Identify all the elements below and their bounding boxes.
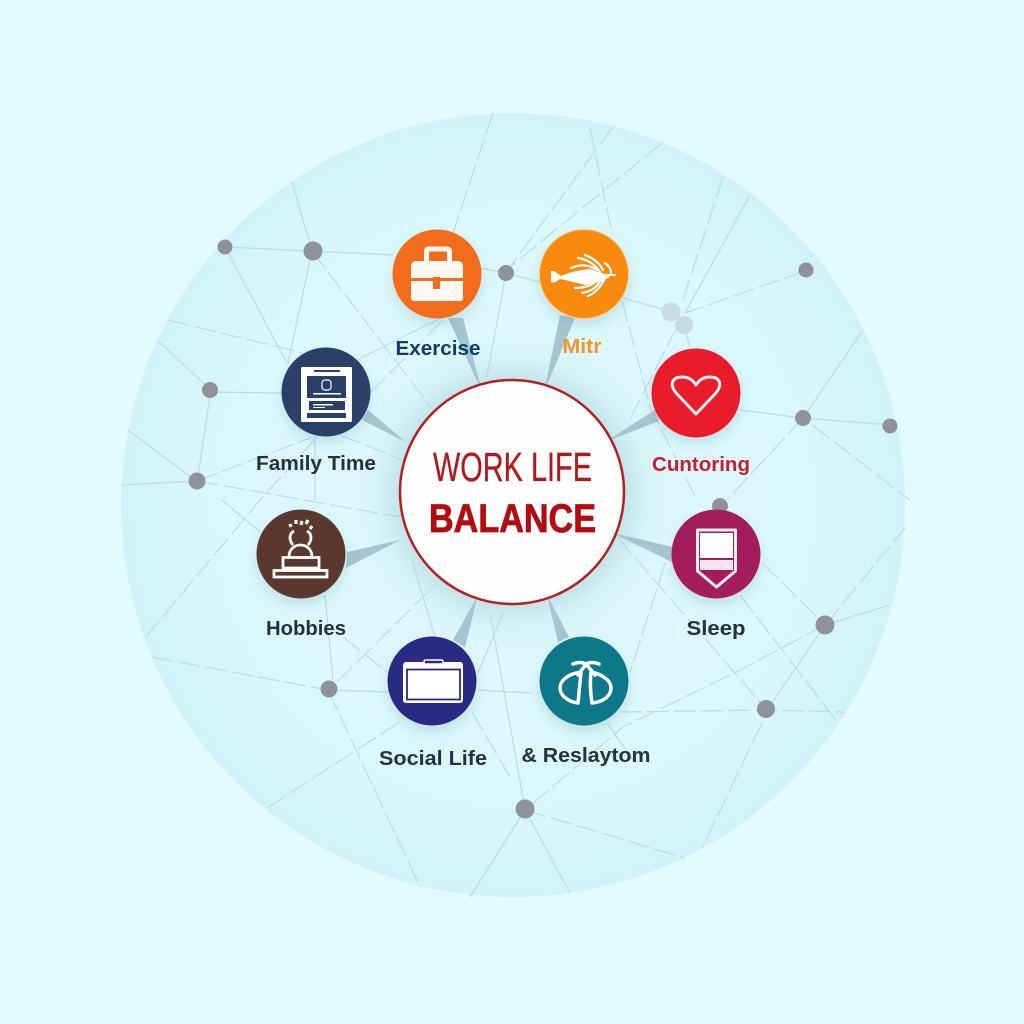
icon: heart [672, 377, 720, 414]
icon: figure on stand [274, 520, 327, 577]
title: work life: WORK LIFE [433, 444, 592, 490]
label: Cuntoring [652, 454, 750, 476]
connectors [346, 315, 672, 647]
item: relaxation [522, 636, 650, 767]
network lines [122, 113, 910, 897]
item: sleep [672, 510, 760, 640]
item: family time [256, 348, 376, 475]
centre halo [342, 323, 682, 663]
central hub [400, 380, 624, 604]
item: hobbies [256, 510, 346, 640]
label: Mitr [562, 336, 602, 358]
icon: bookmark [698, 530, 736, 587]
label: Family Time [256, 453, 376, 475]
icon: briefcase [411, 249, 463, 301]
label: Social Life [379, 748, 487, 770]
background disc [121, 113, 905, 897]
item: exercise [392, 230, 482, 360]
icon: bow [560, 662, 611, 703]
label: Sleep [686, 618, 746, 640]
label: & Reslaytom [522, 745, 650, 767]
label: Exercise [396, 338, 480, 360]
icon: document [301, 367, 352, 422]
label: Hobbies [266, 618, 346, 640]
icon: case [403, 660, 463, 703]
item: mitr [540, 230, 628, 358]
item: social life [379, 636, 487, 770]
icon: winged figure [551, 255, 615, 296]
item: cuntoring [652, 348, 750, 476]
network nodes [188, 240, 898, 818]
title: balance: BALANCE [429, 497, 596, 541]
